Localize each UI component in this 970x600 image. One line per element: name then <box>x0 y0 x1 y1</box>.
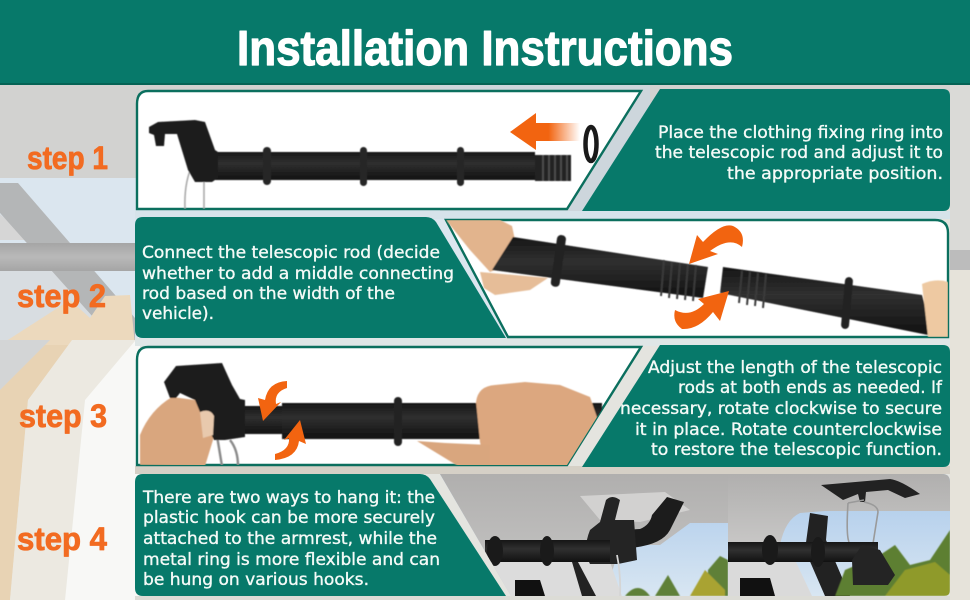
panel: step 4 text <box>135 474 506 596</box>
hand: right gripping rod <box>476 382 598 466</box>
panel: step 2 photo <box>446 220 948 337</box>
panel: step 2 text: whether to add a middle connecting <box>142 264 454 284</box>
header bar <box>0 0 970 85</box>
hand: left holding hook <box>140 397 215 466</box>
panel: step 3 text: necessary, rotate clockwise to secure <box>620 399 942 419</box>
rod <box>485 540 610 562</box>
metal ring <box>617 555 620 596</box>
rod: right section <box>720 267 933 336</box>
metal ring <box>847 502 878 550</box>
step 3 label: step 3 <box>19 398 107 434</box>
telescopic rod <box>238 397 602 446</box>
panel: step 3 text: to restore the telescopic function. <box>651 440 942 460</box>
step 1 label: step 1 <box>27 140 108 176</box>
panel: step 1 text <box>582 89 950 211</box>
ceiling hook <box>821 479 920 502</box>
icon: rotate arrow bottom <box>674 291 729 329</box>
panel: step 3 photo <box>137 347 641 466</box>
panel: step 4 text: attached to the armrest, while the <box>143 529 437 549</box>
photo: plastic hook on armrest <box>440 474 728 596</box>
panel: step 3 text <box>582 345 950 467</box>
plastic hook hanging <box>852 545 895 585</box>
panel: step 2 text <box>135 217 506 338</box>
icon: rotate arrow top <box>689 225 743 264</box>
panel: step 4 text: There are two ways to hang it: the <box>142 488 435 508</box>
panel: step 1 photo <box>137 91 641 209</box>
panel: step 4 text: be hung on various hooks. <box>143 570 369 590</box>
panel: step 1 text: the appropriate position. <box>727 164 943 184</box>
rod <box>728 542 878 562</box>
metal ring <box>216 439 240 465</box>
hook <box>164 363 245 440</box>
telescopic rod with rings <box>212 147 571 186</box>
panel: step 3 text: Adjust the length of the telescopic <box>648 358 942 378</box>
panel: step 4 text: metal ring is more flexible and can <box>143 550 440 570</box>
panel: step 2 text: Connect the telescopic rod (decide <box>142 243 440 263</box>
step 4 label: step 4 <box>17 521 107 557</box>
icon: rotate arrow lower <box>275 420 306 460</box>
hand: left <box>446 220 515 272</box>
icon: rotate arrow upper <box>258 381 287 421</box>
metal ring <box>185 168 204 209</box>
panel: step 1 text: the telescopic rod and adjust it to <box>655 143 943 163</box>
panel: step 2 text: rod based on the width of the <box>142 284 395 304</box>
hook <box>149 120 218 182</box>
panel: step 3 text: it in place. Rotate counterclockwise <box>635 420 942 440</box>
panel: step 3 text: rods at both ends as needed. If <box>678 378 943 398</box>
title: Installation Instructions <box>237 22 733 76</box>
icon: orange arrow <box>510 113 580 150</box>
panel: step 1 text: Place the clothing fixing ring into <box>658 123 943 143</box>
panel: step 4 text: plastic hook can be more securely <box>143 508 435 528</box>
icon: rubber ring <box>586 127 596 161</box>
panel: step 2 text: vehicle). <box>142 304 214 324</box>
step 2 label: step 2 <box>17 278 106 314</box>
armrest hook <box>634 497 684 548</box>
photo: metal ring on hook <box>728 474 950 596</box>
panel: step 4 photos <box>440 474 950 596</box>
hand: right <box>922 280 948 337</box>
rod: left section <box>492 237 708 298</box>
